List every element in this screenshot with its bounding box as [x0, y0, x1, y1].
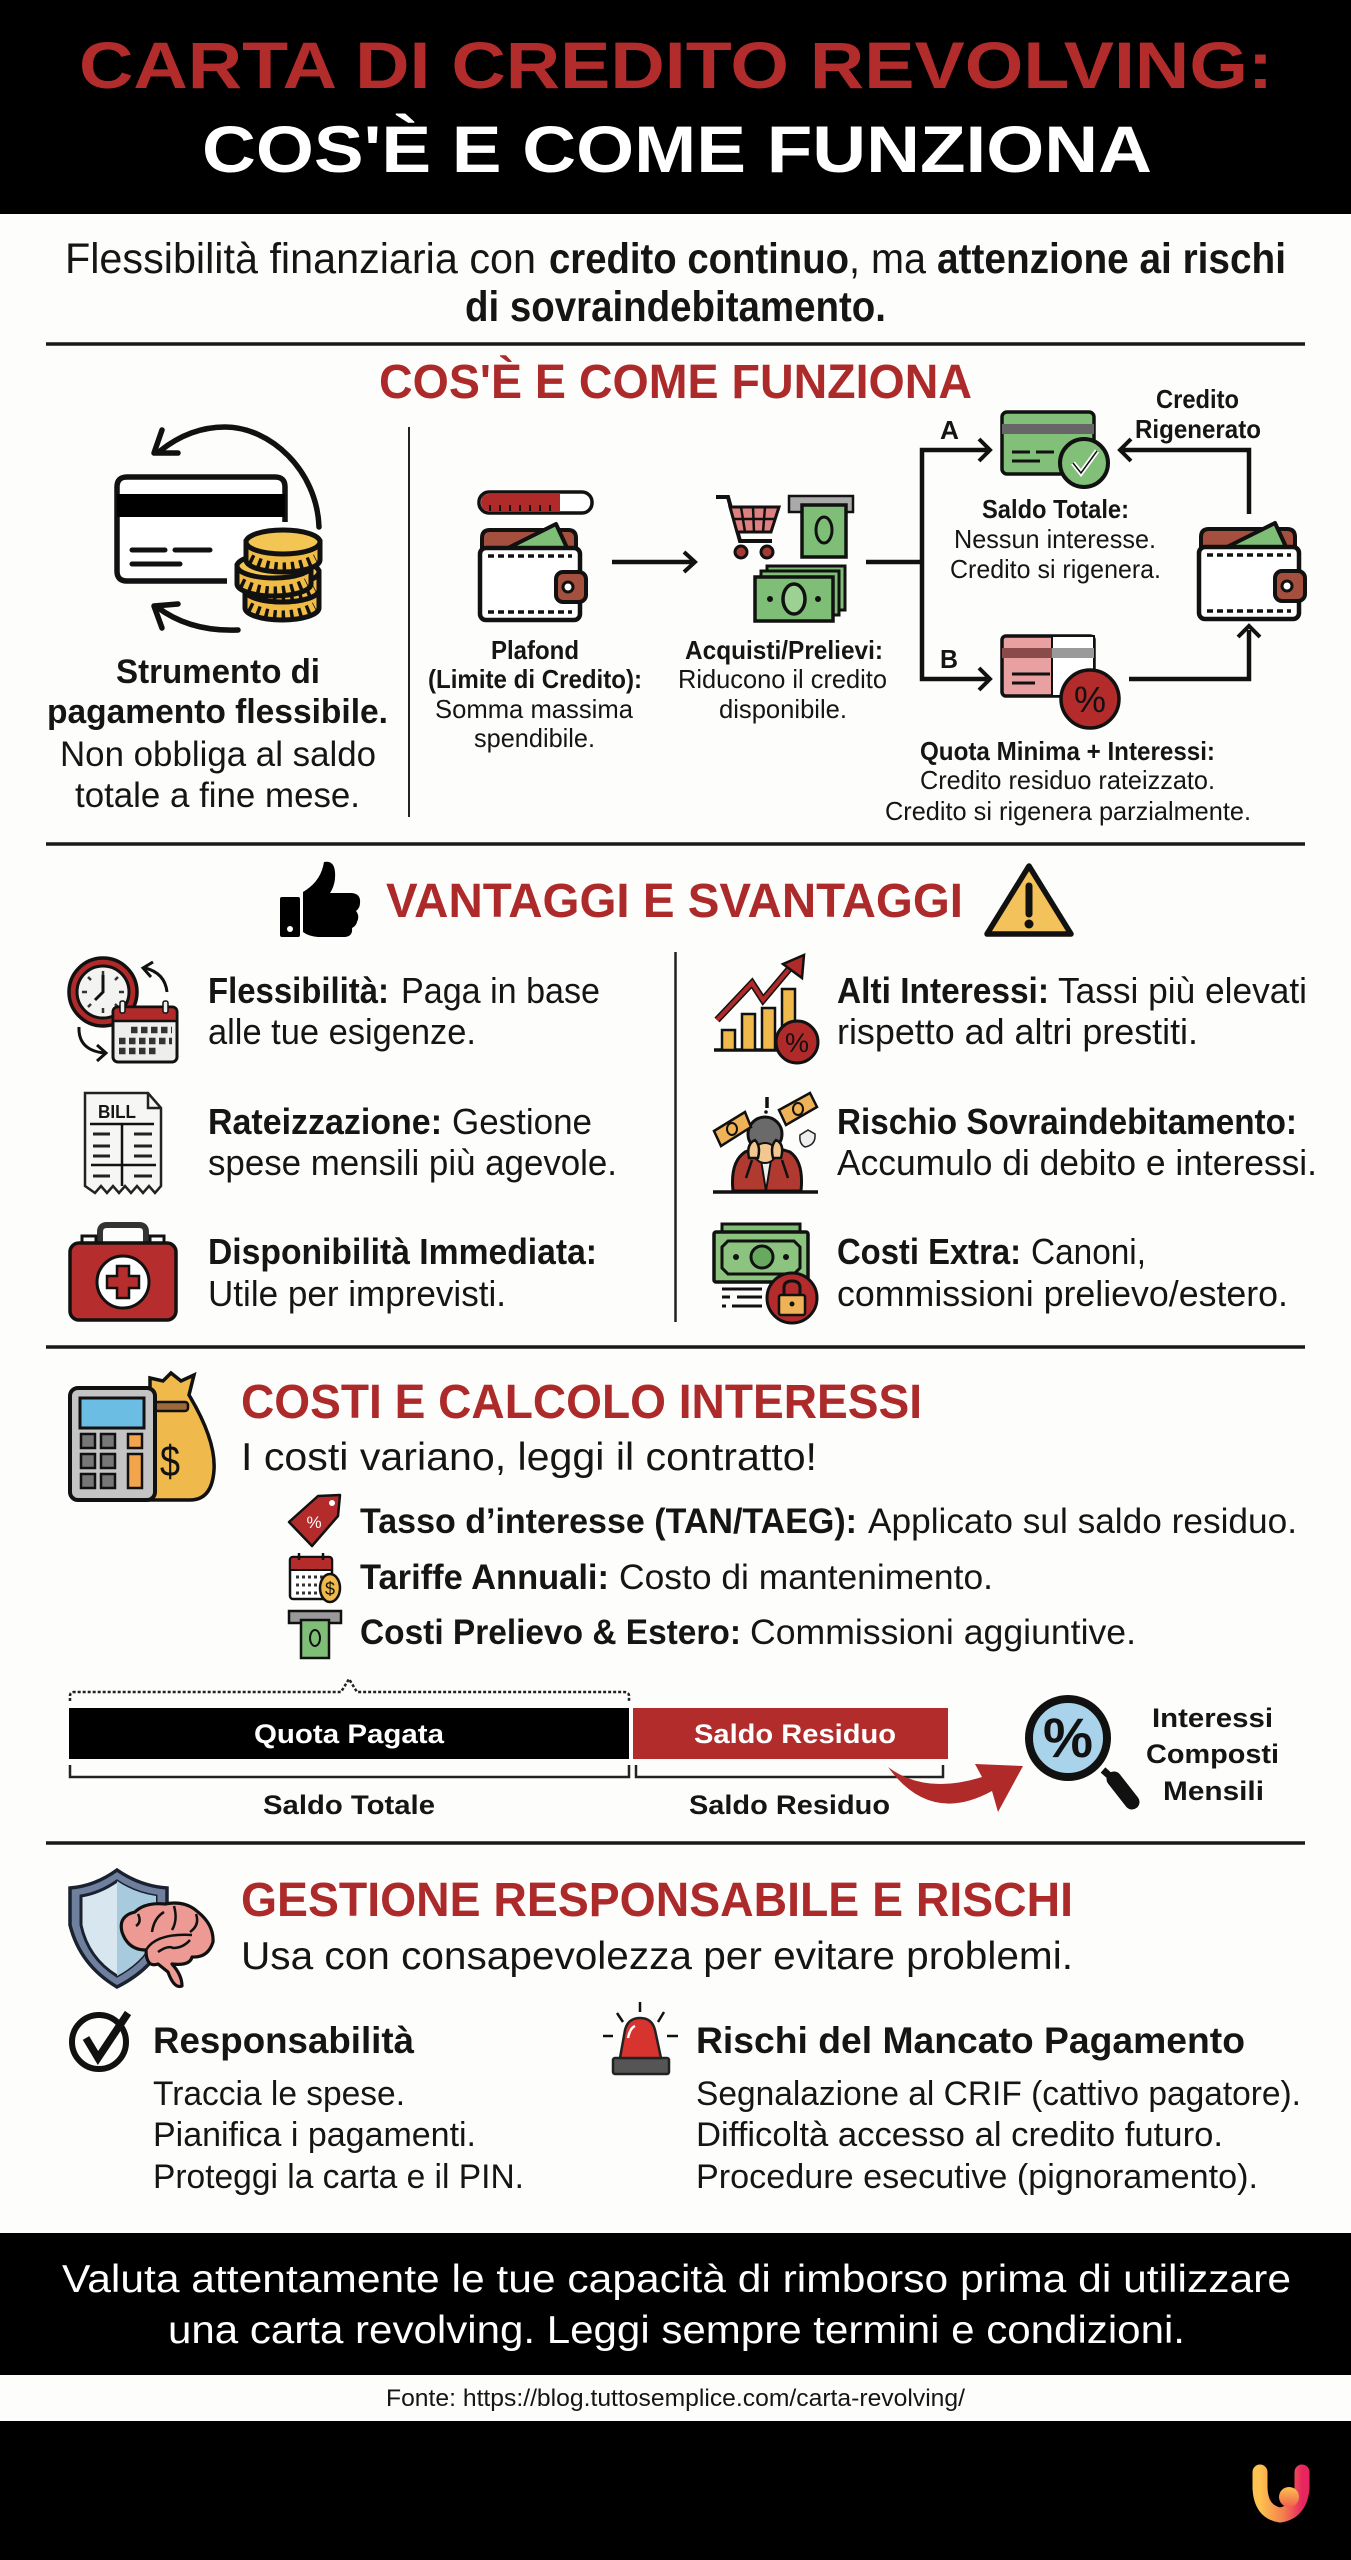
- section subheading: Usa con consapevolezza per evitare problemi.: [241, 1935, 1073, 1978]
- text: strumento di pagamento: [47, 653, 388, 815]
- label: saldo totale: [950, 494, 1161, 584]
- label: saldo totale: Saldo Totale: [263, 1790, 435, 1820]
- text: strumento di pagamento: pagamento flessibile.: [47, 693, 388, 731]
- heading: Responsabilità: [153, 2020, 414, 2061]
- advantage: disponibilità immediata: [70, 1225, 597, 1320]
- advantage: flessibilità: [69, 958, 600, 1062]
- segment: saldo residuo: [633, 1708, 948, 1759]
- icon: red card with percent: %: [1074, 679, 1106, 720]
- icon: first aid kit: [70, 1225, 176, 1320]
- icon: bill: BILL: [98, 1102, 136, 1122]
- icon: wallet right: [1199, 523, 1305, 619]
- subtitle: di sovraindebitamento.: [465, 283, 886, 331]
- label: quota minima: Credito residuo rateizzato.: [920, 765, 1215, 795]
- list: Proteggi la carta e il PIN.: [153, 2158, 524, 2196]
- label: credito rigenerato: Rigenerato: [1135, 414, 1261, 444]
- panel: rischi del mancato pagamento: [603, 2002, 1301, 2196]
- subtitle: attenzione ai rischi: [937, 235, 1286, 283]
- arrows: branching paths A and B: B: [940, 644, 958, 674]
- icon: rising chart: [714, 955, 818, 1063]
- text: [208, 1231, 597, 1314]
- segment: saldo residuo: Saldo Residuo: [694, 1719, 896, 1749]
- list: Difficoltà accesso al credito futuro.: [696, 2116, 1223, 2154]
- icon: calculator and money bag: [70, 1373, 214, 1500]
- icon: calendar with coin: $: [325, 1579, 335, 1599]
- label: plafond: [428, 635, 642, 753]
- text: Rateizzazione:: [208, 1101, 442, 1142]
- icon: price tag: %: [306, 1513, 322, 1532]
- subtitle: , ma: [849, 235, 926, 283]
- text: Flessibilità:: [208, 970, 389, 1011]
- text: Gestione: [452, 1101, 592, 1142]
- text: [837, 1101, 1317, 1183]
- icon: cash and lock: [714, 1224, 817, 1323]
- text: spese mensili più agevole.: [208, 1142, 617, 1183]
- text: strumento di pagamento: Non obbliga al saldo: [60, 735, 376, 774]
- logo: [1260, 2472, 1302, 2515]
- subtitle: Flessibilità finanziaria con: [65, 235, 536, 283]
- list: Traccia le spese.: [153, 2075, 405, 2113]
- list: Procedure esecutive (pignoramento).: [696, 2158, 1258, 2196]
- panel: responsabilità: [72, 2013, 524, 2196]
- disadvantage: rischio sovraindebitamento: [713, 1093, 1317, 1192]
- icon: stressed person: [713, 1093, 818, 1192]
- header band: [0, 0, 1351, 214]
- text: Costi Extra:: [837, 1231, 1021, 1272]
- icon: calculator and money bag: $: [160, 1437, 180, 1486]
- subtitle: [65, 235, 1286, 331]
- label: quota minima: Credito si rigenera parzialmente.: [885, 796, 1251, 826]
- label: acquisti prelievi: [678, 635, 887, 724]
- label: quota minima: [885, 736, 1251, 826]
- icon: thumbs up: [280, 862, 360, 937]
- cost item: tariffe: Tariffe Annuali:: [360, 1558, 609, 1597]
- title line 2: COS'È E COME FUNZIONA: [202, 112, 1152, 186]
- cost item: tasso: Applicato sul saldo residuo.: [868, 1502, 1297, 1541]
- text: Paga in base: [401, 970, 600, 1011]
- list: Pianifica i pagamenti.: [153, 2116, 476, 2154]
- list: Segnalazione al CRIF (cattivo pagatore).: [696, 2075, 1301, 2113]
- label: quota minima: Quota Minima + Interessi:: [920, 736, 1215, 766]
- icon: shield and brain: [70, 1870, 213, 1987]
- label: acquisti prelievi: Riducono il credito: [678, 664, 887, 694]
- callout band: Valuta attentamente le tue capacità di rimborso prima di utilizzare: [62, 2258, 1291, 2301]
- text: Tassi più elevati: [1058, 970, 1307, 1011]
- label: interessi composti mensili: Composti: [1146, 1739, 1279, 1769]
- cost item: prelievo: Costi Prelievo & Estero:: [360, 1613, 741, 1652]
- text: [837, 1231, 1288, 1314]
- label: interessi composti mensili: Mensili: [1163, 1776, 1264, 1806]
- icon: plafond wallet with gauge: [479, 492, 592, 620]
- disadvantage: costi extra: [714, 1224, 1288, 1323]
- text: strumento di pagamento: totale a fine mese.: [75, 776, 360, 815]
- icon: bill: [85, 1093, 161, 1193]
- text: Disponibilità Immediata:: [208, 1231, 597, 1272]
- cost item: tasso: [289, 1495, 1297, 1546]
- text: [208, 1101, 617, 1183]
- cost item: prelievo: [289, 1611, 1136, 1658]
- icon: clock and calendar: [69, 958, 177, 1062]
- label: interessi composti mensili: Interessi: [1152, 1703, 1273, 1733]
- icon: magnifier percent: [1029, 1699, 1132, 1802]
- arrows: branching paths A and B: A: [940, 415, 959, 445]
- icon: warning triangle: [987, 866, 1071, 934]
- cost item: tariffe: [290, 1553, 993, 1602]
- section heading: cos'è e come funziona: COS'È E COME FUNZIONA: [379, 355, 972, 409]
- dotted brace: [70, 1679, 629, 1701]
- label: plafond: Somma massima: [435, 694, 634, 724]
- label: acquisti prelievi: Acquisti/Prelievi:: [685, 635, 883, 665]
- text: Alti Interessi:: [837, 970, 1049, 1011]
- section heading: gestione responsabile: GESTIONE RESPONSABILE E RISCHI: [241, 1874, 1073, 1927]
- advantage: rateizzazione: [85, 1093, 617, 1193]
- label: interessi composti mensili: [1146, 1703, 1279, 1806]
- bottom band: [0, 2421, 1351, 2560]
- label: saldo totale: Credito si rigenera.: [950, 554, 1161, 584]
- label: plafond: Plafond: [491, 635, 579, 665]
- text: Utile per imprevisti.: [208, 1273, 506, 1314]
- icon: siren: [603, 2002, 678, 2074]
- arrow: plafond to purchases: [612, 552, 695, 572]
- icon: card with coins and cycle arrows: [117, 427, 320, 630]
- icon: cart atm and cash: [716, 496, 853, 621]
- label: saldo totale: Saldo Totale:: [982, 494, 1129, 524]
- text: Accumulo di debito e interessi.: [837, 1142, 1317, 1183]
- segment: quota pagata: Quota Pagata: [254, 1719, 445, 1749]
- cost item: tariffe: Costo di mantenimento.: [619, 1558, 993, 1597]
- arrows: branching paths A and B: [866, 415, 990, 690]
- text: Canoni,: [1031, 1231, 1146, 1272]
- label: acquisti prelievi: disponibile.: [719, 694, 847, 724]
- source: Fonte: https://blog.tuttosemplice.com/carta-revolving/: [386, 2385, 965, 2412]
- icon: price tag: [289, 1495, 340, 1546]
- icon: calendar with coin: [290, 1553, 340, 1602]
- text: commissioni prelievo/estero.: [837, 1273, 1288, 1314]
- label: plafond: (Limite di Credito):: [428, 664, 642, 694]
- callout band: una carta revolving. Leggi sempre termini e condizioni.: [168, 2309, 1185, 2352]
- section heading: vantaggi e svantaggi: VANTAGGI E SVANTAGGI: [386, 875, 963, 928]
- label: saldo residuo: Saldo Residuo: [689, 1790, 890, 1820]
- heading: Rischi del Mancato Pagamento: [696, 2020, 1245, 2061]
- subtitle: credito continuo: [549, 235, 849, 283]
- icon: green card with check: [1002, 412, 1108, 487]
- section heading: costi e calcolo interessi: COSTI E CALCOLO INTERESSI: [241, 1376, 922, 1429]
- title line 1: CARTA DI CREDITO REVOLVING:: [79, 28, 1273, 102]
- text: [837, 970, 1307, 1052]
- cost item: tasso: Tasso d’interesse (TAN/TAEG):: [360, 1502, 857, 1541]
- arrow: credit regenerated: [1120, 439, 1249, 514]
- icon: magnifier percent: %: [1043, 1706, 1093, 1769]
- label: credito rigenerato: [1135, 384, 1261, 444]
- label: plafond: spendibile.: [474, 723, 595, 753]
- text: Rischio Sovraindebitamento:: [837, 1101, 1297, 1142]
- icon: rising chart: %: [785, 1028, 809, 1058]
- label: credito rigenerato: Credito: [1156, 384, 1239, 414]
- icon: check circle: [72, 2013, 128, 2069]
- cost item: prelievo: Commissioni aggiuntive.: [750, 1613, 1136, 1652]
- arrow: red curved: [888, 1764, 1023, 1812]
- list: [696, 2075, 1301, 2196]
- section subheading: I costi variano, leggi il contratto!: [241, 1436, 817, 1479]
- callout band: [0, 2233, 1351, 2375]
- segment: quota pagata: [69, 1708, 629, 1759]
- icon: red card with percent: [1002, 636, 1119, 728]
- label: saldo totale: Nessun interesse.: [954, 524, 1156, 554]
- arrow: from B back to wallet: [1129, 626, 1260, 679]
- text: alle tue esigenze.: [208, 1011, 476, 1052]
- list: [153, 2075, 524, 2196]
- icon: atm cash: [289, 1611, 341, 1658]
- text: rispetto ad altri prestiti.: [837, 1011, 1198, 1052]
- text: strumento di pagamento: Strumento di: [116, 653, 320, 691]
- disadvantage: alti interessi: [714, 955, 1307, 1063]
- chart: balance bar: [69, 1679, 948, 1820]
- text: [208, 970, 600, 1052]
